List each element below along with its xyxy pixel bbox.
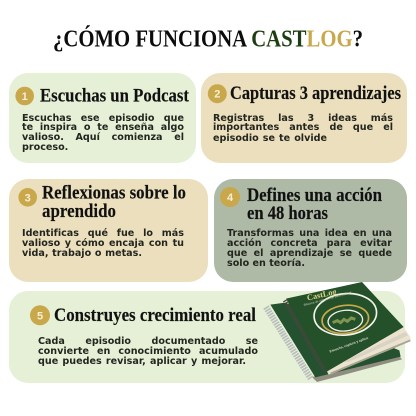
step 5 number and heading: Construyes crecimiento real xyxy=(54,305,256,326)
step 5 text: que puedes revisar, aplicar y mejorar. xyxy=(38,356,246,367)
cover rings xyxy=(312,291,379,338)
step 2 number and heading: 2 xyxy=(214,89,220,101)
step 2 text: importantes antes de que el xyxy=(213,122,393,133)
step 5 text: Cada episodio documentado se xyxy=(38,336,258,347)
step 4 text: Transformas una idea en una xyxy=(227,228,392,239)
step 3 number and heading: aprendido xyxy=(42,201,116,222)
step 4 number and heading xyxy=(220,185,382,224)
step 4 text xyxy=(227,228,392,269)
step 2 text xyxy=(213,113,393,144)
front notebook cover xyxy=(286,282,404,371)
step 4 text: solo en teoría. xyxy=(227,258,305,269)
step 3 number and heading: 3 xyxy=(25,192,31,204)
step 3 text xyxy=(22,228,184,259)
panel: step 5 xyxy=(9,291,405,383)
title: ¿CÓMO FUNCIONA CASTLOG? xyxy=(53,26,363,52)
panel: step 3 xyxy=(9,179,208,282)
step 3 text: vida, trabajo o metas. xyxy=(22,248,142,259)
step 1 number and heading: Escuchas un Podcast xyxy=(40,86,190,107)
cover subtitle: Bitácora de aprendizaje para podcast xyxy=(303,290,352,307)
step 4 number and heading: en 48 horas xyxy=(247,203,328,224)
panel: step 4 xyxy=(214,179,407,282)
step 5 text xyxy=(38,336,258,367)
step 3 number and heading xyxy=(18,183,186,222)
step 1 text: proceso. xyxy=(22,142,68,153)
step 1 number and heading: 1 xyxy=(22,91,28,103)
cover title: CastLog xyxy=(306,287,338,303)
panel: step 2 xyxy=(201,73,407,163)
step 1 text: valioso. Aquí comienza el xyxy=(22,132,184,143)
step 5 number and heading: 5 xyxy=(37,310,43,322)
front notebook pages xyxy=(327,327,410,375)
step 1 text xyxy=(22,113,184,153)
step 2 text: Registras las 3 ideas más xyxy=(213,113,393,124)
step 3 text: valioso y cómo encaja con tu xyxy=(22,238,184,249)
step 4 number and heading: Defines una acción xyxy=(247,185,382,206)
cover tagline: Escucha, captura y aplica xyxy=(329,336,369,354)
step 1 text: Escuchas ese episodio que xyxy=(22,113,184,124)
panel: step 1 xyxy=(9,73,196,163)
step 3 number and heading: Reflexionas sobre lo xyxy=(42,183,186,204)
back notebook xyxy=(266,303,402,382)
step 4 number and heading: 4 xyxy=(227,192,234,204)
step 2 text: episodio se te olvide xyxy=(213,133,327,144)
step 5 text: convierte en conocimiento acumulado xyxy=(38,346,258,357)
step 1 text: te inspira o te enseña algo xyxy=(22,122,184,133)
step 4 text: acción concreta para evitar xyxy=(227,238,392,249)
step 4 text: que el aprendizaje se quede xyxy=(227,248,392,259)
step 3 text: Identificas qué fue lo más xyxy=(22,228,184,239)
